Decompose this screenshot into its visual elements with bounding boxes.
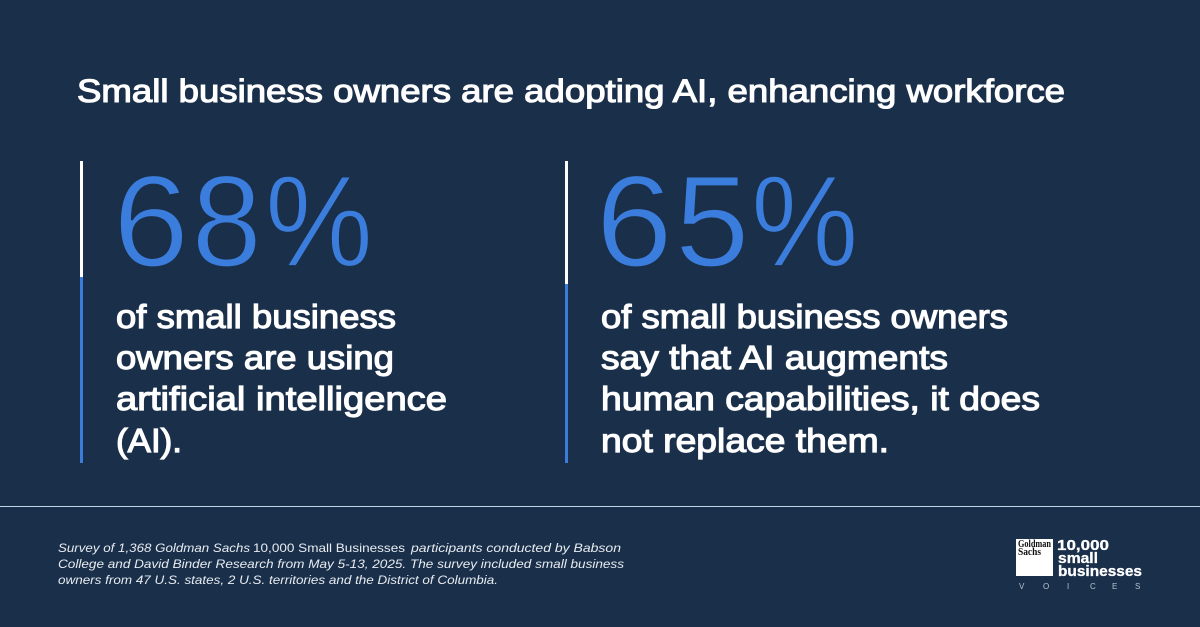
logo mark: Goldman Sachs — [1016, 539, 1053, 576]
text block: right stat description: of small business owners — [601, 298, 1008, 335]
footnote: survey source: participants conducted by Babson — [410, 541, 621, 555]
big number: 65%: % — [751, 148, 858, 294]
logo wordmark: 10,000 — [1057, 537, 1109, 554]
logo tagline: VOICES: E — [1112, 582, 1117, 591]
text block: left stat description — [116, 298, 447, 459]
logo tagline: VOICES: O — [1043, 582, 1049, 591]
text block: right stat description: human capabilities, it does — [601, 380, 1040, 417]
text block: left stat description: (AI). — [116, 422, 182, 459]
logo mark: Goldman Sachs: Sachs — [1018, 547, 1041, 558]
accent bar: left stat — [80, 161, 83, 463]
text block: right stat description: say that AI augments — [601, 339, 948, 376]
logo wordmark — [1057, 537, 1142, 580]
text block: right stat description: not replace them. — [601, 422, 889, 459]
text block: left stat description: owners are using — [116, 339, 394, 376]
big number: 65%: 6 — [596, 148, 673, 294]
logo tagline: VOICES: S — [1135, 582, 1140, 591]
big number: 68%: % — [265, 148, 373, 294]
logo wordmark: small — [1058, 550, 1098, 567]
footnote: survey source: owners from 47 U.S. states, 2 U.S. territories and the District of Columbia. — [58, 573, 498, 587]
title: Small business owners are adopting AI, enhancing workforce — [77, 73, 1065, 109]
text block: right stat description — [601, 298, 1040, 459]
panel: 65% statistic — [565, 148, 1040, 463]
footnote: survey source: 10,000 Small Businesses — [253, 541, 405, 555]
logo tagline: VOICES — [1019, 582, 1140, 591]
text block: left stat description: artificial intelligence — [116, 380, 447, 417]
big number: 68%: 8 — [192, 148, 262, 294]
accent bar: right stat — [565, 161, 568, 463]
footnote: survey source: Survey of 1,368 Goldman Sachs — [58, 541, 250, 555]
logo tagline: VOICES: I — [1067, 582, 1069, 591]
panel: 68% statistic — [80, 148, 447, 463]
footnote: survey source — [58, 541, 624, 587]
logo mark: Goldman Sachs: Goldman — [1018, 539, 1051, 550]
logo: Goldman Sachs 10,000 Small Businesses Voices — [1016, 537, 1142, 591]
logo wordmark: businesses — [1058, 563, 1142, 580]
text block: left stat description: of small business — [116, 298, 396, 335]
big number: 65%: 5 — [675, 148, 750, 294]
big number: 68%: 6 — [113, 148, 189, 294]
logo tagline: VOICES: C — [1090, 582, 1096, 591]
logo tagline: VOICES: V — [1019, 582, 1025, 591]
footnote: survey source: College and David Binder Research from May 5-13, 2025. The survey included small business — [58, 557, 624, 571]
